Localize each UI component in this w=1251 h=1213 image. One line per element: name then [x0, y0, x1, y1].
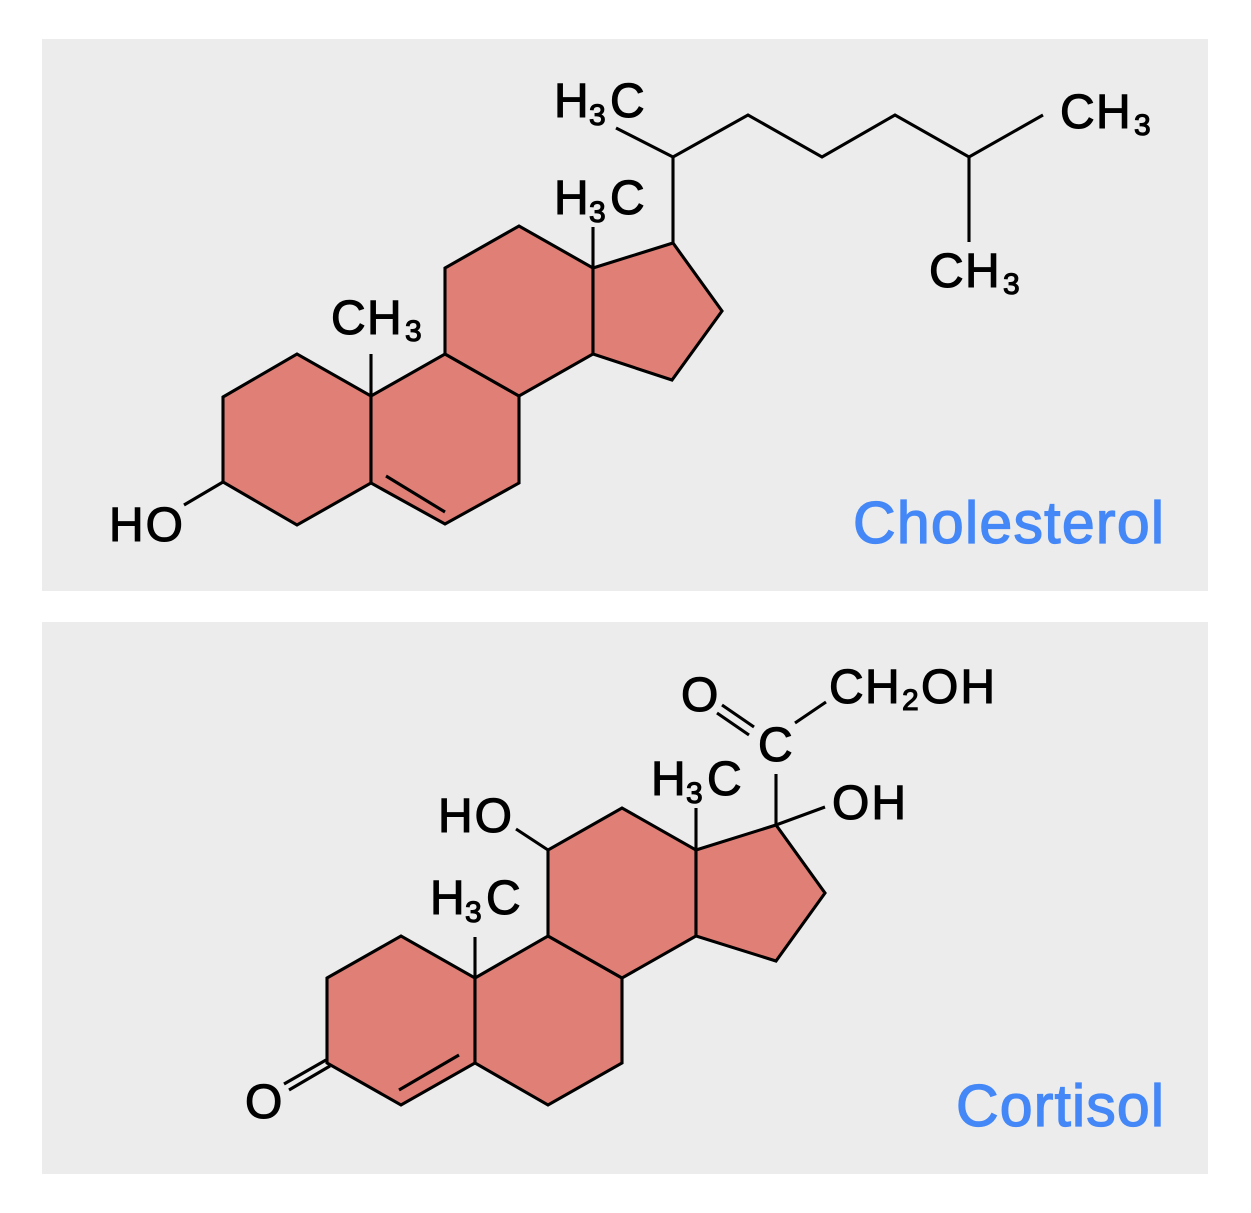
label: CH3 chain branch: 3	[1003, 268, 1020, 301]
label: CH2OH: C	[829, 661, 864, 714]
cortisol ring system	[327, 808, 825, 1105]
label: CH3 chain end: H	[1096, 86, 1131, 139]
label: H3C ring	[554, 172, 645, 229]
label: CH2OH: OH	[921, 661, 995, 714]
label: H3C ring: 3	[589, 196, 606, 229]
label: H3C upper	[651, 753, 742, 810]
label: H3C ring: C	[486, 872, 521, 925]
label: O ketone: O	[245, 1076, 282, 1129]
label: CH3 chain end: 3	[1134, 109, 1151, 142]
label: OH: OH	[832, 777, 906, 830]
label: H3C upper: 3	[686, 777, 703, 810]
label: CH2OH: H	[865, 661, 900, 714]
label: O carbonyl: O	[681, 669, 718, 722]
label: H3C ring	[430, 872, 521, 929]
label: H3C upper: H	[651, 753, 686, 806]
label: H3C top: H	[554, 75, 589, 128]
label: CH3 ring	[331, 292, 422, 348]
label: CH3 ring: 3	[405, 315, 422, 348]
label: H3C top	[554, 75, 645, 132]
label: H3C ring: H	[554, 172, 589, 225]
label: H3C top: C	[610, 75, 645, 128]
label: HO: HO	[109, 499, 183, 552]
label: H3C ring: H	[430, 872, 465, 925]
cholesterol ring system	[223, 226, 722, 525]
label: H3C ring: 3	[465, 896, 482, 929]
label: CH3 chain end: C	[1060, 86, 1095, 139]
label: CH3 ring: C	[331, 292, 366, 345]
label: H3C ring: C	[610, 172, 645, 225]
label: CH3 chain branch: C	[929, 245, 964, 298]
title: Cortisol: Cortisol	[956, 1073, 1164, 1139]
cholesterol side chain and bonds	[184, 115, 1043, 505]
label: CH3 ring: H	[367, 292, 402, 345]
panel: cortisol	[42, 622, 1208, 1174]
label: CH3 chain branch	[929, 245, 1020, 301]
label: H3C top: 3	[589, 99, 606, 132]
label: CH3 chain branch: H	[965, 245, 1000, 298]
label: HO: HO	[438, 790, 512, 843]
cortisol bonds	[284, 702, 826, 1090]
label: CH2OH: 2	[902, 684, 919, 717]
label: C: C	[758, 719, 793, 772]
panel: cholesterol	[42, 39, 1208, 591]
label: H3C upper: C	[707, 753, 742, 806]
title: Cholesterol: Cholesterol	[853, 490, 1164, 556]
label: CH3 chain end	[1060, 86, 1151, 142]
label: CH2OH	[829, 661, 995, 717]
